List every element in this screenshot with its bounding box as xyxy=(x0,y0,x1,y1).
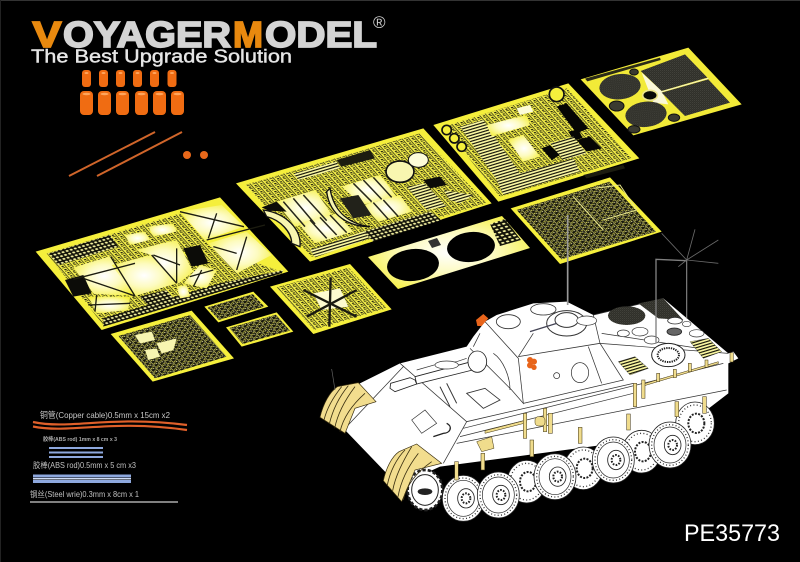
legend: steel wire: 钢丝(Steel wrie)0.3mm x 8cm x 1 xyxy=(30,489,140,499)
legend: ABS rod 1mm xyxy=(43,435,117,458)
fret: engine deck detail plate xyxy=(433,83,639,202)
logo: Voyager Model: OYAGER xyxy=(63,14,231,55)
fret: large hull plate xyxy=(36,197,288,330)
legend: copper cable: 铜管(Copper cable)0.5mm x 15cm x2 xyxy=(40,410,170,420)
inner road wheels xyxy=(507,402,714,503)
fret: grille mesh plate xyxy=(581,48,742,135)
logo: Voyager Model: M xyxy=(233,14,263,55)
fret: small panel sheet xyxy=(111,311,234,382)
hull and turret silhouette xyxy=(345,298,738,483)
product code: PE35773 xyxy=(684,520,780,547)
legend: ABS rod 0.5mm xyxy=(33,460,136,483)
legend: ABS rod 0.5mm: 胶棒(ABS rod)0.5mm x 5 cm x3 xyxy=(33,460,136,470)
brass fender front right xyxy=(383,444,442,502)
fret: ladder strip lower xyxy=(226,312,293,347)
tank illustration xyxy=(320,215,738,521)
fret: track and ventilation plate xyxy=(236,128,492,262)
orange resin cylinders xyxy=(80,70,184,115)
logo: Voyager Model: ® xyxy=(373,13,386,32)
fret: ladder strip upper xyxy=(204,292,268,322)
legend: ABS rod 1mm: 胶棒(ABS rod) 1mm x 8 cm x 3 xyxy=(43,435,117,443)
tagline: The Best Upgrade Solution xyxy=(31,46,292,66)
engine deck grilles xyxy=(608,298,722,375)
legend: copper cable xyxy=(33,410,187,430)
logo: Voyager Model xyxy=(32,13,386,55)
brass side stands xyxy=(455,353,733,480)
fret: circular plate xyxy=(368,216,530,289)
antennas xyxy=(332,215,718,390)
gun barrel xyxy=(390,351,487,392)
logo: Voyager Model: V xyxy=(32,14,62,55)
brass fender front left xyxy=(320,383,376,433)
fret: small parts plate xyxy=(511,177,662,264)
fret: antenna parts sheet xyxy=(270,264,392,334)
drive sprocket xyxy=(408,470,442,510)
outer road wheels xyxy=(442,422,691,521)
logo: Voyager Model: ODEL xyxy=(265,14,377,55)
copper rods xyxy=(69,132,182,176)
orange smoke dischargers xyxy=(476,314,537,370)
resin dots xyxy=(183,151,208,159)
